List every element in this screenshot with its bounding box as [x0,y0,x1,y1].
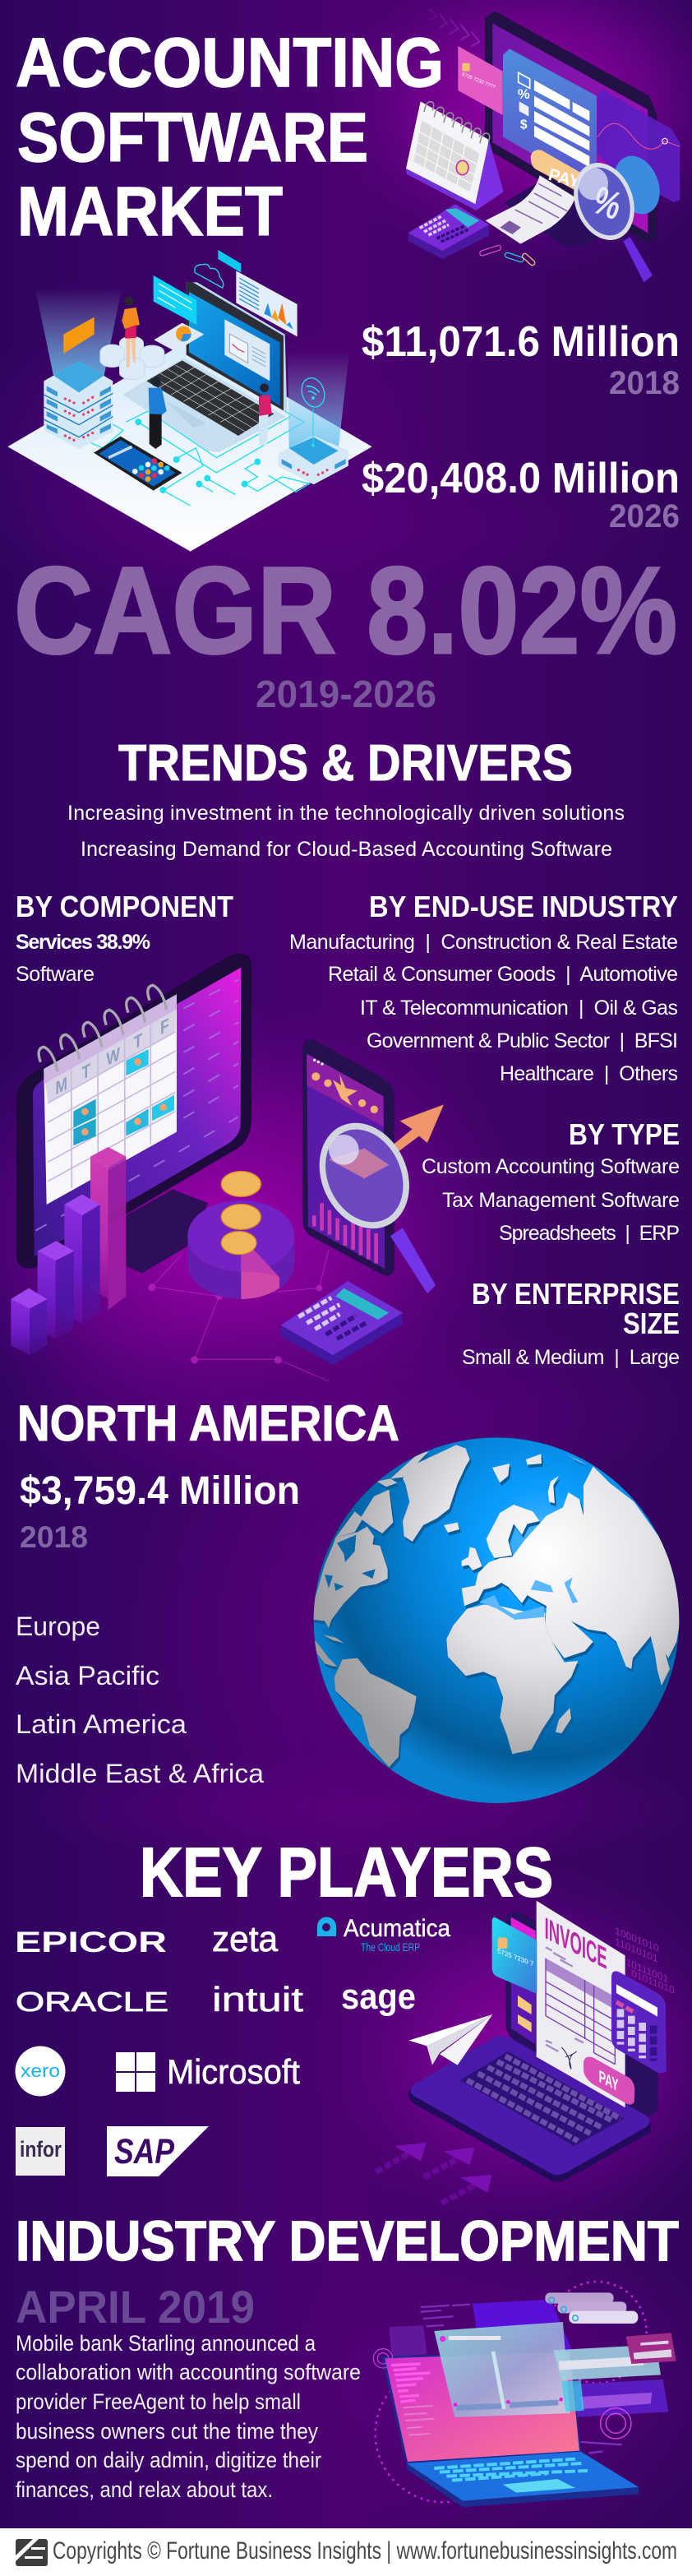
logo: epicor: EPICOR [15,1926,167,1959]
market size 2026: $20,408.0 Million [362,455,680,502]
company logos [15,1915,450,2176]
april 2019: APRIL 2019 [16,2281,255,2333]
calendar [406,101,504,210]
trends and drivers: TRENDS & DRIVERS [118,735,573,792]
logo: acumatica: The Cloud ERP [361,1940,420,1954]
by component: BY COMPONENT [16,890,233,923]
growth arrows [376,2143,491,2204]
logo: sap [107,2126,209,2176]
by type: BY TYPE [569,1117,680,1151]
invoice [537,1901,625,2107]
credit card [492,1917,537,1994]
title [16,24,444,250]
market size 2018 [362,318,680,401]
key players: KEY PLAYERS [140,1834,553,1911]
by component: Services 38.9% [16,931,150,954]
title: SOFTWARE [17,99,368,176]
glass window [434,2322,570,2417]
woman in orange jacket [122,296,140,368]
laptop [122,282,287,452]
dotted rings [376,2282,647,2502]
other regions: Europe [16,1612,100,1641]
laptop keyboard base [407,2452,639,2507]
invoice: INVOICE [545,1912,607,1977]
calendar: W [106,1043,120,1071]
right server with wifi [278,352,349,484]
development description [16,2331,361,2502]
by type: Custom Accounting Software [422,1155,680,1178]
development description: finances, and relax about tax. [16,2477,273,2502]
binary digits [615,1925,675,1996]
back panels [389,2300,668,2417]
by end-use industry: Manufacturing | Construction & Real Estate [289,931,678,954]
calculator [408,204,489,259]
calendar: T [134,1029,143,1054]
logo: oracle: ORACLE [16,1986,168,2017]
search bars [545,2292,638,2324]
market size 2026 [362,455,680,534]
market size 2018: 2018 [609,365,680,401]
right chart panel [597,90,680,221]
by component [16,890,233,986]
man in blue [149,377,167,449]
folder icons [518,1996,532,2033]
calendar [39,985,177,1205]
by end-use industry [289,890,678,1085]
market size 2026: 2026 [609,498,680,534]
logo: acumatica: Acumatica [344,1915,450,1942]
pay button [584,2057,634,2105]
by enterprise size: SIZE [623,1306,680,1340]
pay button: PAY [599,2066,619,2095]
north america: NORTH AMERICA [17,1395,399,1451]
market size 2018: $11,071.6 Million [362,318,680,366]
title: ACCOUNTING [16,24,444,101]
continents [312,1445,682,1770]
illustration: laptop with floating windows [373,2282,676,2507]
by type [422,1117,680,1245]
monitor [16,954,251,1273]
bar charts [11,1147,126,1355]
logo: zeta: zeta [212,1919,279,1959]
receipt and pay tag [486,150,583,244]
by type: Tax Management Software [442,1189,680,1212]
network floor lines [149,1250,329,1381]
binary digits: 10001010 [615,1925,659,1954]
receipt and pay tag: PAY [547,165,583,192]
binary digits: 01011010 [631,1968,675,1996]
floating panels [154,250,298,351]
by end-use industry: Healthcare | Others [500,1062,678,1085]
other regions [16,1612,264,1788]
logo: sap: SAP [114,2132,174,2171]
paper plane [408,2014,492,2065]
phone behind invoice [506,1910,658,2117]
credit card [458,46,503,115]
calendar: F [160,1015,169,1039]
form panel: % [518,86,530,102]
logo: microsoft [116,2052,300,2092]
form panel: $ [520,118,528,132]
magnifier: % [587,179,627,229]
laptop screen [381,2351,581,2463]
icon: chevrons [429,8,479,47]
phone [94,437,182,491]
paper clips [479,245,536,266]
credit card: 5725 7230 ???? [461,72,496,90]
other regions: Asia Pacific [16,1661,159,1690]
by end-use industry: Government & Public Sector | BFSI [367,1029,678,1052]
trends and drivers: Increasing Demand for Cloud-Based Accounting Software [81,838,612,861]
footer [0,2528,692,2576]
calculator [281,1281,403,1365]
binary digits: 11010101 [615,1935,658,1965]
left server with light beam [35,288,122,449]
binary digits: 10111001 [626,1956,668,1986]
logo: infor: infor [20,2137,62,2162]
logo: microsoft: Microsoft [167,2052,300,2091]
development description: collaboration with accounting software [16,2360,361,2384]
development description: provider FreeAgent to help small [16,2389,301,2414]
calendar: M [55,1073,67,1099]
right window [553,2345,661,2412]
trends and drivers: Increasing investment in the technologically driven solutions [67,802,625,825]
logo: intuit: intuit [212,1980,303,2019]
logo: infor [16,2127,65,2176]
development description: Mobile bank Starling announced a [16,2331,316,2356]
credit card: 5725 7230 7 [497,1947,534,1968]
screen code lines [391,2364,430,2402]
logo: xero: xero [21,2060,60,2081]
trends and drivers [67,735,625,861]
north america: 2018 [20,1520,88,1554]
by end-use industry: Retail & Consumer Goods | Automotive [328,963,678,986]
woman in pink [259,383,272,446]
logo: fortune business insights [16,2539,48,2566]
code lines [421,2305,622,2453]
north america [17,1395,399,1554]
pink card [626,2333,676,2364]
phone and magnifier [302,1039,444,1293]
logo: sage: sage [341,1977,416,2017]
floor [7,340,372,552]
other regions: Middle East & Africa [16,1759,264,1788]
logo: xero [15,2046,66,2097]
illustration: isometric laptop on circuit board [7,250,372,552]
calculator [611,1971,667,2074]
logo: acumatica [317,1915,450,1954]
by component: Software [16,963,95,986]
circuit lines [90,409,310,506]
by enterprise size [462,1277,680,1369]
development description: spend on daily admin, digitize their [16,2448,321,2472]
north america: $3,759.4 Million [20,1469,300,1513]
title: MARKET [17,173,283,250]
rings [373,2349,631,2439]
illustration: monitor with invoice form, calendar, calculator and magnifier [406,8,680,282]
pie with coins [187,1172,294,1299]
by enterprise size: Small & Medium | Large [462,1346,680,1369]
development description: business owners cut the time they [16,2419,318,2444]
illustration: calendar monitor, charts, coins, phone, calculator [11,954,444,1381]
data cylinders [100,336,164,380]
laptop base [408,2036,651,2182]
monitor [485,11,657,247]
CAGR: 2019-2026 [256,673,436,715]
magnifier [564,155,653,282]
globe [312,1437,682,1803]
by end-use industry: IT & Telecommunication | Oil & Gas [360,997,678,1020]
illustration: laptop with invoice [376,1901,675,2204]
form panel [503,49,597,187]
by type: Spreadsheets | ERP [499,1222,680,1245]
other regions: Latin America [16,1709,187,1739]
calendar: T [81,1060,90,1085]
